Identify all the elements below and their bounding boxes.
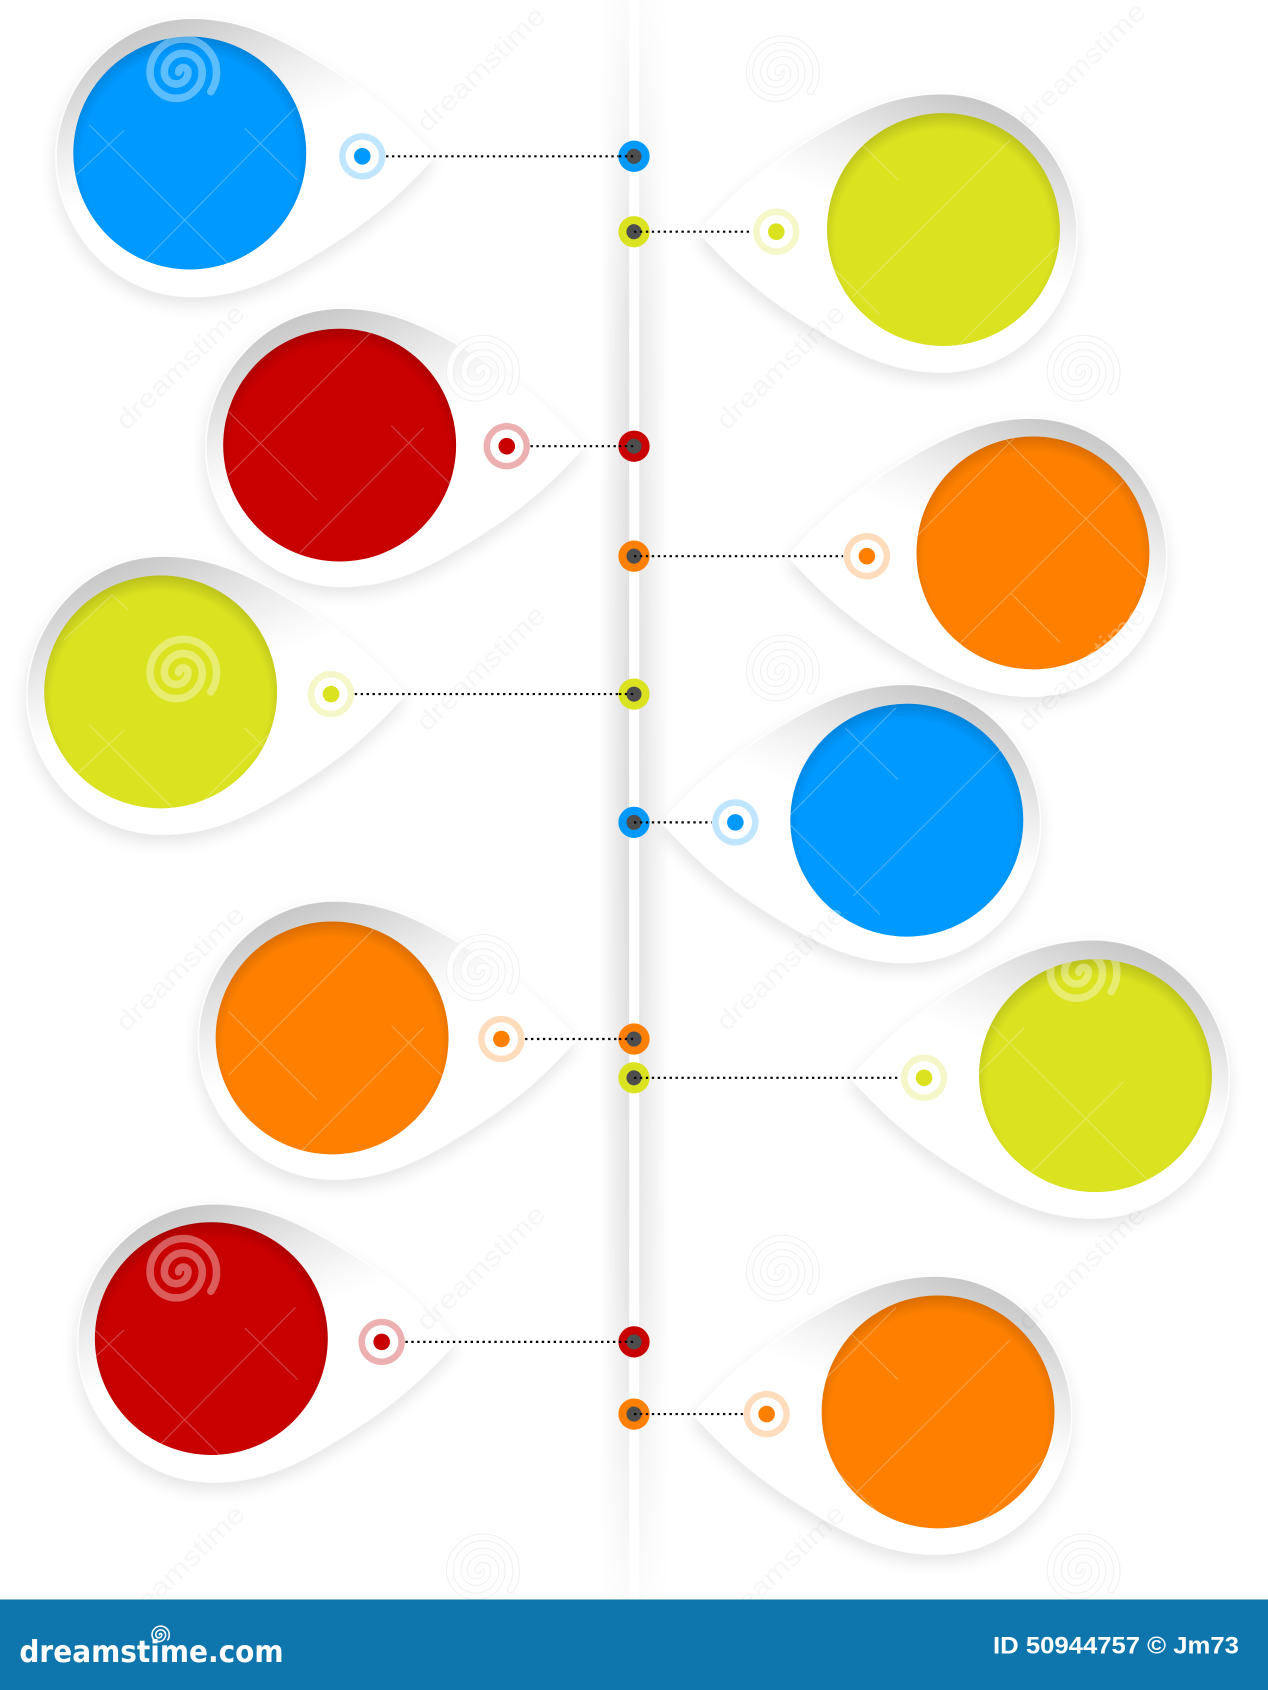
panel: drop 2 right [788, 418, 1167, 696]
target ring: green [753, 209, 800, 255]
connector: orange right lower [634, 1413, 743, 1415]
disc: orange right lower [822, 1296, 1055, 1528]
watermark text on white: dreamstime [410, 1199, 551, 1336]
watermark text on white: dreamstime [410, 600, 551, 737]
timeline spine [606, 70, 660, 1530]
target ring: blue [712, 799, 759, 846]
hub: blue [618, 141, 650, 172]
watermark text on white: dreamstime [1011, 1199, 1152, 1336]
target ring: green [308, 671, 354, 717]
hub: orange [618, 541, 650, 572]
target ring: orange [844, 533, 890, 579]
disc: green right lower [979, 959, 1212, 1192]
disc: green right [827, 113, 1060, 346]
connector: blue right [634, 821, 712, 823]
hub: blue [618, 807, 650, 838]
connector: orange left [525, 1038, 634, 1040]
hub: red [618, 431, 650, 462]
watermark spirals on white [450, 39, 1117, 1596]
logo text: dreamstime.com [19, 1635, 284, 1670]
disc: green left [44, 576, 277, 808]
panel: drop 1 left [56, 18, 435, 296]
connector: green right [634, 231, 753, 233]
watermark text on white: dreamstime [109, 298, 251, 435]
logo spiral icon [152, 1626, 169, 1642]
target ring: blue [339, 133, 385, 179]
target ring: orange [743, 1391, 790, 1437]
footer bar [0, 1599, 1268, 1690]
disc: orange left [216, 922, 449, 1154]
target ring: red [359, 1319, 405, 1365]
watermark text on white: dreamstime [710, 298, 851, 435]
watermark text on white: dreamstime [1011, 600, 1152, 737]
target ring: orange [478, 1016, 525, 1062]
watermark on discs: dreamstime [1011, 600, 1152, 737]
disc: blue left [73, 37, 306, 269]
hub: green [618, 216, 650, 247]
panel: drop 1 right [699, 94, 1077, 372]
panel: drop 3 right [662, 684, 1040, 962]
connector: red left lower [405, 1341, 634, 1343]
hub: orange [618, 1023, 650, 1055]
disc: red left lower [95, 1222, 328, 1455]
watermark text on white: dreamstime [410, 0, 551, 138]
disc: blue right [790, 704, 1023, 937]
target ring: red [484, 423, 530, 469]
panel: drop 2 left [206, 308, 584, 586]
panel: drop 3 left [27, 556, 405, 834]
image id credit: ID 50944757 © Jm73 [993, 1633, 1239, 1659]
panel: drop 4 right [851, 940, 1229, 1218]
panel: drop 5 left [78, 1204, 456, 1482]
watermark text on white: dreamstime [109, 899, 251, 1037]
watermark text on white: dreamstime [1011, 0, 1152, 134]
hub: green [618, 678, 650, 710]
hub: orange [618, 1398, 650, 1430]
connector: orange right [634, 555, 843, 557]
hub: red [618, 1326, 650, 1357]
connector: green left [355, 693, 634, 695]
disc: orange right [916, 437, 1149, 669]
connector: blue left [386, 155, 634, 157]
drop panels [27, 18, 584, 1482]
target ring: green [901, 1055, 947, 1101]
connector: green right lower [634, 1077, 900, 1079]
watermark text on white [109, 0, 1152, 1636]
disc: red left [223, 329, 456, 562]
panel: drop 4 left [198, 901, 577, 1179]
connector: red left [530, 445, 634, 447]
hub: green [618, 1062, 650, 1093]
panel: drop 5 right [693, 1276, 1072, 1554]
watermark text on white: dreamstime [710, 899, 851, 1037]
watermark text on white: dreamstime [710, 1498, 851, 1636]
watermark on discs: dreamstime [710, 899, 851, 1037]
watermark text on white: dreamstime [109, 1498, 251, 1636]
